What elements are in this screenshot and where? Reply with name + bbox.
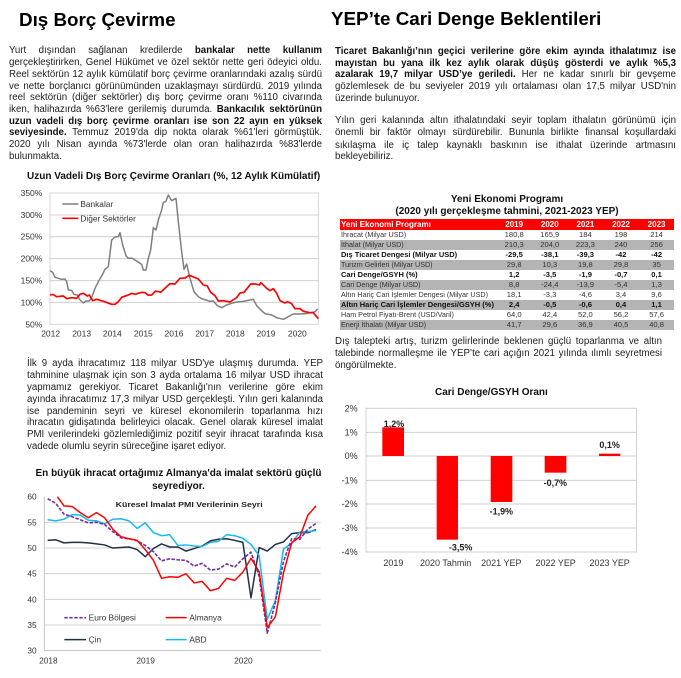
- text block: imports: gözlemlesek de bu seviyeler 2019 yılı ortalaması olan 17,5 milyar USD'nin: [335, 81, 676, 92]
- x axis labels: 2018: [226, 329, 245, 339]
- chart heading: largest export partner Germany: [36, 468, 321, 492]
- text block: external debt rollover: uzun vadeli dış borç çevirme oranları ise son 22 ayın en yüksek: [9, 116, 322, 127]
- table: Yeni Ekonomi Programı: 40,5: [614, 320, 628, 329]
- text block: exports: ise pandeminin seyri ve küresel ekonomilerin toparlanma hızı: [27, 406, 323, 416]
- table: Yeni Ekonomi Programı: Yeni Ekonomi Programı: [341, 220, 431, 228]
- table: Yeni Ekonomi Programı: 184: [579, 230, 592, 239]
- y axis labels: 300%: [21, 210, 43, 220]
- y axis labels: [342, 403, 358, 557]
- table: Yeni Ekonomi Programı: İhracat (Milyar USD): [341, 230, 406, 239]
- table: Yeni Ekonomi Programı: 165,9: [540, 230, 559, 239]
- x axis labels: 2016: [165, 329, 184, 339]
- table: Yeni Ekonomi Programı: 29,8: [507, 260, 522, 269]
- y axis labels: -2%: [342, 499, 358, 509]
- text block: exports: ayında ihracatımız 17,3 milyar USD gerçekleşti. Yılın geri kalanında: [27, 394, 323, 404]
- table heading: Yeni Ekonomi Programı: [395, 194, 619, 217]
- x axis labels: [39, 656, 253, 666]
- table: Yeni Ekonomi Programı: -42: [651, 250, 662, 259]
- series: Çin: [48, 530, 316, 598]
- table: Yeni Ekonomi Programı: -38,1: [541, 250, 558, 259]
- chart inner title: Küresel İmalat PMI Verilerinin Seyri: [116, 500, 263, 509]
- value labels: [384, 419, 620, 552]
- x axis labels: 2013: [72, 329, 91, 339]
- value labels: -1,9%: [490, 507, 513, 517]
- text block: exports: PMI verilerindeki gözlemlediğimiz pozitif seyir ihracat tarafında kısa: [27, 428, 323, 440]
- y axis labels: 35: [27, 620, 37, 630]
- table: Yeni Ekonomi Programı: -39,3: [577, 250, 594, 259]
- table: Yeni Ekonomi Programı: -3,5: [543, 270, 556, 279]
- table: Yeni Ekonomi Programı: 64,0: [507, 310, 522, 319]
- text block: exports: [27, 357, 323, 452]
- legend: Euro Bölgesi: [89, 613, 136, 623]
- title: Dış Borç Çevirme: Dış Borç Çevirme: [19, 9, 176, 30]
- table: Yeni Ekonomi Programı: -3,3: [543, 290, 556, 299]
- table: Yeni Ekonomi Programı: -5,4: [614, 280, 628, 289]
- table: Yeni Ekonomi Programı: İthalat (Milyar USD): [341, 240, 404, 249]
- text block: imports: azalarak 19,7 milyar USD’ye geriledi. Her ne kadar sınırlı bir gevşeme: [335, 69, 676, 80]
- table: Yeni Ekonomi Programı: 204,0: [540, 240, 559, 249]
- text block: external debt rollover: reel sektörün (diğer sektörler) dış borç çevirme oranı %110 civarında: [9, 92, 322, 103]
- table: Yeni Ekonomi Programı: -0,6: [579, 300, 592, 309]
- line chart: long term debt rollover ratios: [21, 188, 319, 339]
- table: Yeni Ekonomi Programı: 29,6: [542, 320, 557, 329]
- y axis labels: 1%: [345, 427, 358, 437]
- y axis labels: 200%: [21, 254, 43, 264]
- table: Yeni Ekonomi Programı: -0,5: [543, 300, 556, 309]
- bar chart: current account to GDP: [342, 403, 638, 568]
- text block: imports: Yılın geri kalanında altın ithalatındaki seyir toplam ithalatın görünümü için: [335, 115, 676, 126]
- bars: [382, 427, 620, 540]
- category labels: 2019: [383, 558, 403, 568]
- chart heading: largest export partner Germany: seyrediyor.: [152, 481, 205, 492]
- legend: Çin: [89, 635, 102, 645]
- table: Yeni Ekonomi Programı: 35: [652, 260, 661, 269]
- table: Yeni Ekonomi Programı: 52,0: [578, 310, 593, 319]
- text block: external debt rollover: Yurt dışından sağlanan kredilerde bankalar nette kullanım: [9, 45, 322, 56]
- x axis labels: 2019: [257, 329, 276, 339]
- table: Yeni Ekonomi Programı: -13,9: [577, 280, 594, 289]
- x axis labels: 2017: [195, 329, 214, 339]
- x axis labels: 2015: [134, 329, 153, 339]
- chart title: long term debt rollover ratios: Uzun Vadeli Dış Borç Çevirme Oranları (%, 12 Aylık Kümülatif): [27, 171, 320, 182]
- title: YEP'te Cari Denge Beklentileri: YEP’te Cari Denge Beklentileri: [331, 8, 601, 29]
- y axis labels: 55: [27, 517, 37, 527]
- category labels: 2023 YEP: [590, 558, 630, 568]
- series: Almanya: [57, 497, 316, 628]
- x axis labels: 2018: [39, 656, 58, 666]
- table: Yeni Ekonomi Programı: 214: [650, 230, 663, 239]
- text block: imports: önemli bir faktör olmayı sürdürebilir. Bununla birlikte finansal koşullardaki: [335, 127, 676, 138]
- table: Yeni Ekonomi Programı: 18,1: [507, 290, 522, 299]
- text block: external debt rollover: bulunmakta.: [9, 151, 62, 162]
- text block: external debt rollover: Reel sektörün 12 aylık kümülatif borç çevirme oranlarındaki azalış sürdü: [9, 69, 322, 80]
- y axis labels: 100%: [21, 297, 43, 307]
- table: Yeni Ekonomi Programı: 2020: [541, 220, 559, 228]
- table: Yeni Ekonomi Programı: 3,4: [616, 290, 626, 299]
- table: Yeni Ekonomi Programı: 56,2: [614, 310, 628, 319]
- category labels: [383, 558, 630, 568]
- table: Yeni Ekonomi Programı: 42,4: [542, 310, 557, 319]
- text block: imports: [335, 46, 676, 162]
- legend: ABD: [189, 635, 206, 645]
- table heading: Yeni Ekonomi Programı: Yeni Ekonomi Programı: [451, 194, 563, 205]
- y axis labels: -3%: [342, 523, 358, 533]
- value labels: 1,2%: [384, 419, 404, 429]
- table heading: Yeni Ekonomi Programı: (2020 yılı gerçekleşme tahmini, 2021-2023 YEP): [395, 206, 619, 217]
- y axis labels: 150%: [21, 276, 43, 286]
- text block: current account outlook: talebinde normalleşme ile YEP’te cari açığın 2021 yılında ılımlı seyretmesi: [335, 348, 662, 359]
- text block: imports: sıkılaşma ile iç talep kaynaklı baskının ise ithalat üzerinde artmasını: [335, 140, 676, 151]
- table: Yeni Ekonomi Programı: Cari Denge/GSYH (%): [341, 270, 418, 279]
- category labels: 2022 YEP: [536, 558, 576, 568]
- table: Yeni Ekonomi Programı: Enerji İthalatı (Milyar USD): [341, 320, 426, 329]
- text block: external debt rollover: gerçekleştirirken, Genel Hükümet ve özel sektör nette geri ödeyici oldu.: [9, 57, 322, 68]
- table: Yeni Ekonomi Programı: 2023: [648, 220, 665, 228]
- table: Yeni Ekonomi Programı: Altın Hariç Cari İşlemler Dengesi (Milyar USD): [341, 290, 488, 299]
- chart title: Cari Denge/GSYH Oranı: Cari Denge/GSYH Oranı: [435, 387, 548, 398]
- table: Yeni Ekonomi Programı: 0,1: [651, 270, 662, 279]
- y axis labels: 250%: [21, 232, 43, 242]
- value labels: -0,7%: [544, 478, 567, 488]
- y axis labels: 50: [27, 543, 37, 553]
- table: Yeni Ekonomi Programı: 223,3: [576, 240, 595, 249]
- text block: imports: mayıstan bu yana ilk kez aylık olarak düşüş gösterdi ve aylık %5,3: [335, 58, 676, 69]
- table: Yeni Ekonomi Programı: 40,8: [649, 320, 664, 329]
- text block: current account outlook: Dış talepteki artış, turizm gelirlerinde beklenen güçlü toparlanma ve altın: [335, 336, 662, 347]
- y axis labels: [27, 492, 37, 656]
- table: Yeni Ekonomi Programı: 1,3: [651, 280, 662, 289]
- category labels: 2021 YEP: [481, 558, 521, 568]
- y axis labels: 40: [27, 594, 37, 604]
- table: Yeni Ekonomi Programı: -1,9: [579, 270, 592, 279]
- series: ABD: [48, 515, 316, 619]
- text block: exports: ihracatın gidişatında belirleyici olacak. Genel olarak küresel imalat: [27, 417, 323, 428]
- table: Yeni Ekonomi Programı: [340, 219, 674, 330]
- series: Bankalar: [50, 195, 318, 319]
- x axis labels: 2020: [288, 329, 307, 339]
- legend: Almanya: [189, 613, 222, 623]
- y axis labels: 60: [27, 492, 37, 502]
- text block: imports: üzerinde bulunuyor.: [335, 93, 420, 104]
- table: Yeni Ekonomi Programı: Ham Petrol Fiyatı-Brent (USD/Varil): [341, 310, 454, 319]
- y axis labels: -4%: [342, 547, 358, 557]
- value labels: 0,1%: [599, 440, 620, 450]
- text block: external debt rollover: ve nette borçlanıcı görünümünden uzaklaşmayı sürdürdü. 2019 yılında: [9, 81, 322, 92]
- text block: imports: Ticaret Bakanlığı’nın geçici verilerine göre ekim ayında ithalatımız ise: [335, 46, 676, 57]
- y axis labels: 2%: [345, 403, 358, 413]
- table: Yeni Ekonomi Programı: Dış Ticaret Dengesi (Milyar USD): [341, 250, 457, 259]
- table: Yeni Ekonomi Programı: 57,6: [649, 310, 664, 319]
- table: Yeni Ekonomi Programı: 8,8: [509, 280, 519, 289]
- line chart: global manufacturing PMI: [27, 492, 321, 666]
- y axis labels: [21, 188, 43, 329]
- table: Yeni Ekonomi Programı: 198: [615, 230, 627, 239]
- category labels: 2020 Tahmin: [420, 558, 471, 568]
- text block: current account outlook: öngörülmekte.: [335, 360, 396, 371]
- text block: current account outlook: [335, 336, 662, 371]
- y axis labels: 50%: [25, 319, 43, 329]
- table: Yeni Ekonomi Programı: Turizm Gelirleri (Milyar USD): [341, 260, 433, 269]
- text block: external debt rollover: 2020 yılı Nisan ayında %73'lerde olan oran halihazırda %83'lerde: [9, 139, 322, 150]
- table: Yeni Ekonomi Programı: 29,8: [614, 260, 628, 269]
- table: Yeni Ekonomi Programı: -4,6: [579, 290, 592, 299]
- legend: [62, 199, 136, 223]
- legend: Diğer Sektörler: [80, 213, 136, 223]
- table: Yeni Ekonomi Programı: 0,4: [616, 300, 626, 309]
- table: Yeni Ekonomi Programı: 1,2: [509, 270, 519, 279]
- table: Yeni Ekonomi Programı: 19,8: [578, 260, 593, 269]
- table: Yeni Ekonomi Programı: 10,3: [542, 260, 557, 269]
- table: Yeni Ekonomi Programı: 2019: [505, 220, 523, 228]
- table: Yeni Ekonomi Programı: Altın Hariç Cari İşlemler Dengesi/GSYH (%): [341, 300, 494, 309]
- y axis labels: -1%: [342, 475, 358, 485]
- table: Yeni Ekonomi Programı: 1,1: [651, 300, 662, 309]
- table: Yeni Ekonomi Programı: 2021: [576, 220, 594, 228]
- table: Yeni Ekonomi Programı: 9,6: [651, 290, 662, 299]
- y axis labels: 30: [27, 646, 37, 656]
- table: Yeni Ekonomi Programı: -24,4: [541, 280, 558, 289]
- text block: external debt rollover: iken, halihazırda %63'lere gerilemiş durumda. Bankacılık sektörünün: [9, 104, 322, 115]
- series: Diğer Sektörler: [50, 275, 318, 319]
- table: Yeni Ekonomi Programı: 41,7: [507, 320, 522, 329]
- table: Yeni Ekonomi Programı: -42: [615, 250, 626, 259]
- y axis labels: 0%: [345, 451, 358, 461]
- table: Yeni Ekonomi Programı: 180,8: [505, 230, 524, 239]
- y axis labels: 350%: [21, 188, 43, 198]
- text block: external debt rollover: seviyesinde. Temmuz 2019'da dip nokta olarak %61'leri görmüştük.: [9, 127, 322, 138]
- table: Yeni Ekonomi Programı: 240: [615, 240, 627, 249]
- table: Yeni Ekonomi Programı: 256: [650, 240, 663, 249]
- chart heading: largest export partner Germany: En büyük ihracat ortağımız Almanya'da imalat sektörü güçlü: [36, 468, 321, 479]
- legend: [64, 613, 222, 645]
- x axis labels: 2012: [41, 329, 60, 339]
- table: Yeni Ekonomi Programı: 210,3: [505, 240, 524, 249]
- text block: exports: vadede olumlu seyrin süreceğine işaret ediyor.: [27, 441, 226, 452]
- legend: Bankalar: [80, 199, 113, 209]
- x axis labels: [41, 329, 307, 339]
- text block: exports: yapmamız gerekiyor. Ticaret Bakanlığı'nın verilerine göre ekim: [27, 382, 323, 393]
- table: Yeni Ekonomi Programı: 2,4: [509, 300, 519, 309]
- value labels: -3,5%: [449, 542, 472, 552]
- x axis labels: 2014: [103, 329, 122, 339]
- text block: external debt rollover: [9, 45, 322, 162]
- table: Yeni Ekonomi Programı: -29,5: [506, 250, 523, 259]
- text block: exports: İlk 9 ayda ihracatımız 118 milyar USD'ye ulaşmış durumda. YEP: [27, 358, 323, 369]
- table: Yeni Ekonomi Programı: -0,7: [614, 270, 628, 279]
- text block: exports: tahminine ulaşmak için son 3 ayda ortalama 16 milyar USD ihracat: [27, 370, 323, 381]
- series: Euro Bölgesi: [48, 499, 316, 633]
- table: Yeni Ekonomi Programı: Cari Denge (Milyar USD): [341, 280, 420, 289]
- x axis labels: 2020: [234, 656, 253, 666]
- text block: imports: bekleyebiliriz.: [335, 151, 393, 162]
- table: Yeni Ekonomi Programı: 36,9: [578, 320, 593, 329]
- y axis labels: 45: [27, 569, 37, 579]
- table: Yeni Ekonomi Programı: 2022: [612, 220, 630, 228]
- x axis labels: 2019: [136, 656, 155, 666]
